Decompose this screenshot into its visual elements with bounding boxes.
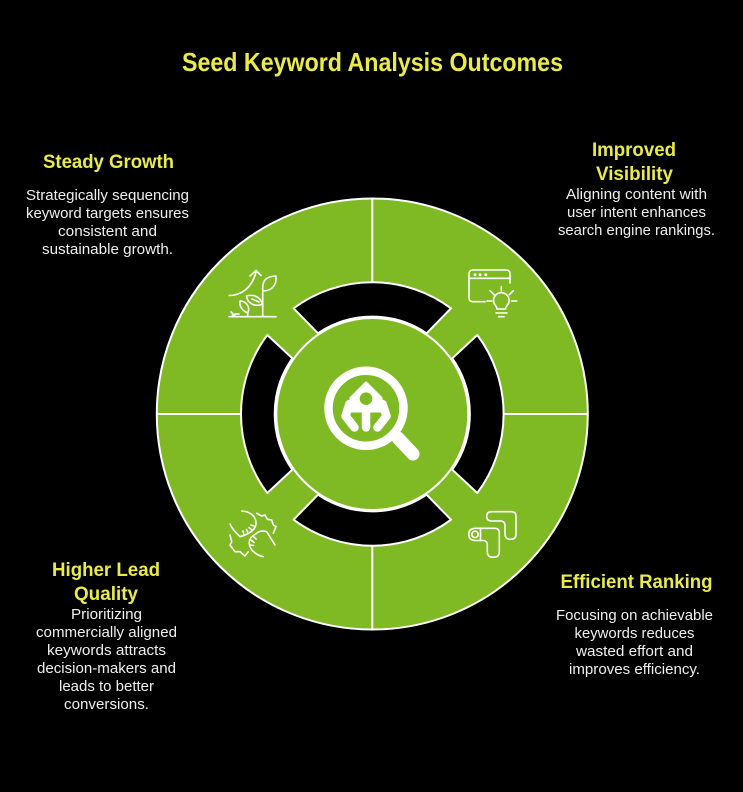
text block: Steady Growth — [26, 151, 189, 258]
text block: Improved Visibility: search engine rankings. — [558, 222, 715, 239]
icon: magnifier with keyword spider — [328, 371, 413, 454]
text block: Higher Lead Quality — [36, 559, 177, 713]
black ring segment: right — [452, 335, 504, 493]
text block: Efficient Ranking: keywords reduces — [574, 625, 694, 642]
icon: handshake — [230, 511, 276, 557]
text block: Steady Growth: Strategically sequencing — [26, 187, 189, 204]
circular diagram — [157, 198, 588, 630]
text block: Steady Growth: keyword targets ensures — [26, 205, 189, 222]
text block: Improved Visibility — [558, 139, 715, 239]
icon: directional arrows — [469, 512, 516, 557]
title: Seed Keyword Analysis Outcomes — [182, 47, 563, 77]
text block: Improved Visibility: Visibility — [596, 163, 673, 185]
quadrant dividers — [157, 198, 588, 630]
text block: Efficient Ranking: improves efficiency. — [569, 661, 700, 678]
text block: Improved Visibility: Aligning content with — [566, 186, 707, 203]
text block: Improved Visibility: user intent enhances — [567, 204, 706, 221]
black ring segment: top — [294, 282, 451, 333]
text block: Higher Lead Quality: conversions. — [64, 696, 149, 713]
text block: Efficient Ranking: wasted effort and — [575, 643, 693, 660]
text block: Improved Visibility: Improved — [592, 139, 676, 161]
text block: Higher Lead Quality: commercially aligned — [36, 624, 177, 641]
text block: Efficient Ranking: Efficient Ranking — [560, 571, 712, 593]
text block: Efficient Ranking: Focusing on achievable — [556, 607, 713, 624]
text block: Higher Lead Quality: Quality — [74, 583, 138, 605]
text block: Steady Growth: consistent and — [58, 223, 157, 240]
icon: growth plant — [229, 270, 276, 317]
central green circle — [276, 318, 468, 510]
text block: Higher Lead Quality: leads to better — [59, 678, 154, 695]
outer green ring — [157, 198, 588, 630]
black ring segment: bottom — [294, 495, 451, 546]
text block: Steady Growth: sustainable growth. — [42, 241, 173, 258]
text block: Efficient Ranking — [556, 571, 713, 678]
text block: Steady Growth: Steady Growth — [43, 151, 174, 173]
text block: Higher Lead Quality: keywords attracts — [47, 642, 166, 659]
text block: Higher Lead Quality: decision-makers and — [37, 660, 176, 677]
text block: Higher Lead Quality: Prioritizing — [71, 606, 142, 623]
icon: browser window and light bulb — [469, 270, 517, 317]
black ring segment: left — [241, 335, 292, 493]
text block: Higher Lead Quality: Higher Lead — [52, 559, 160, 581]
